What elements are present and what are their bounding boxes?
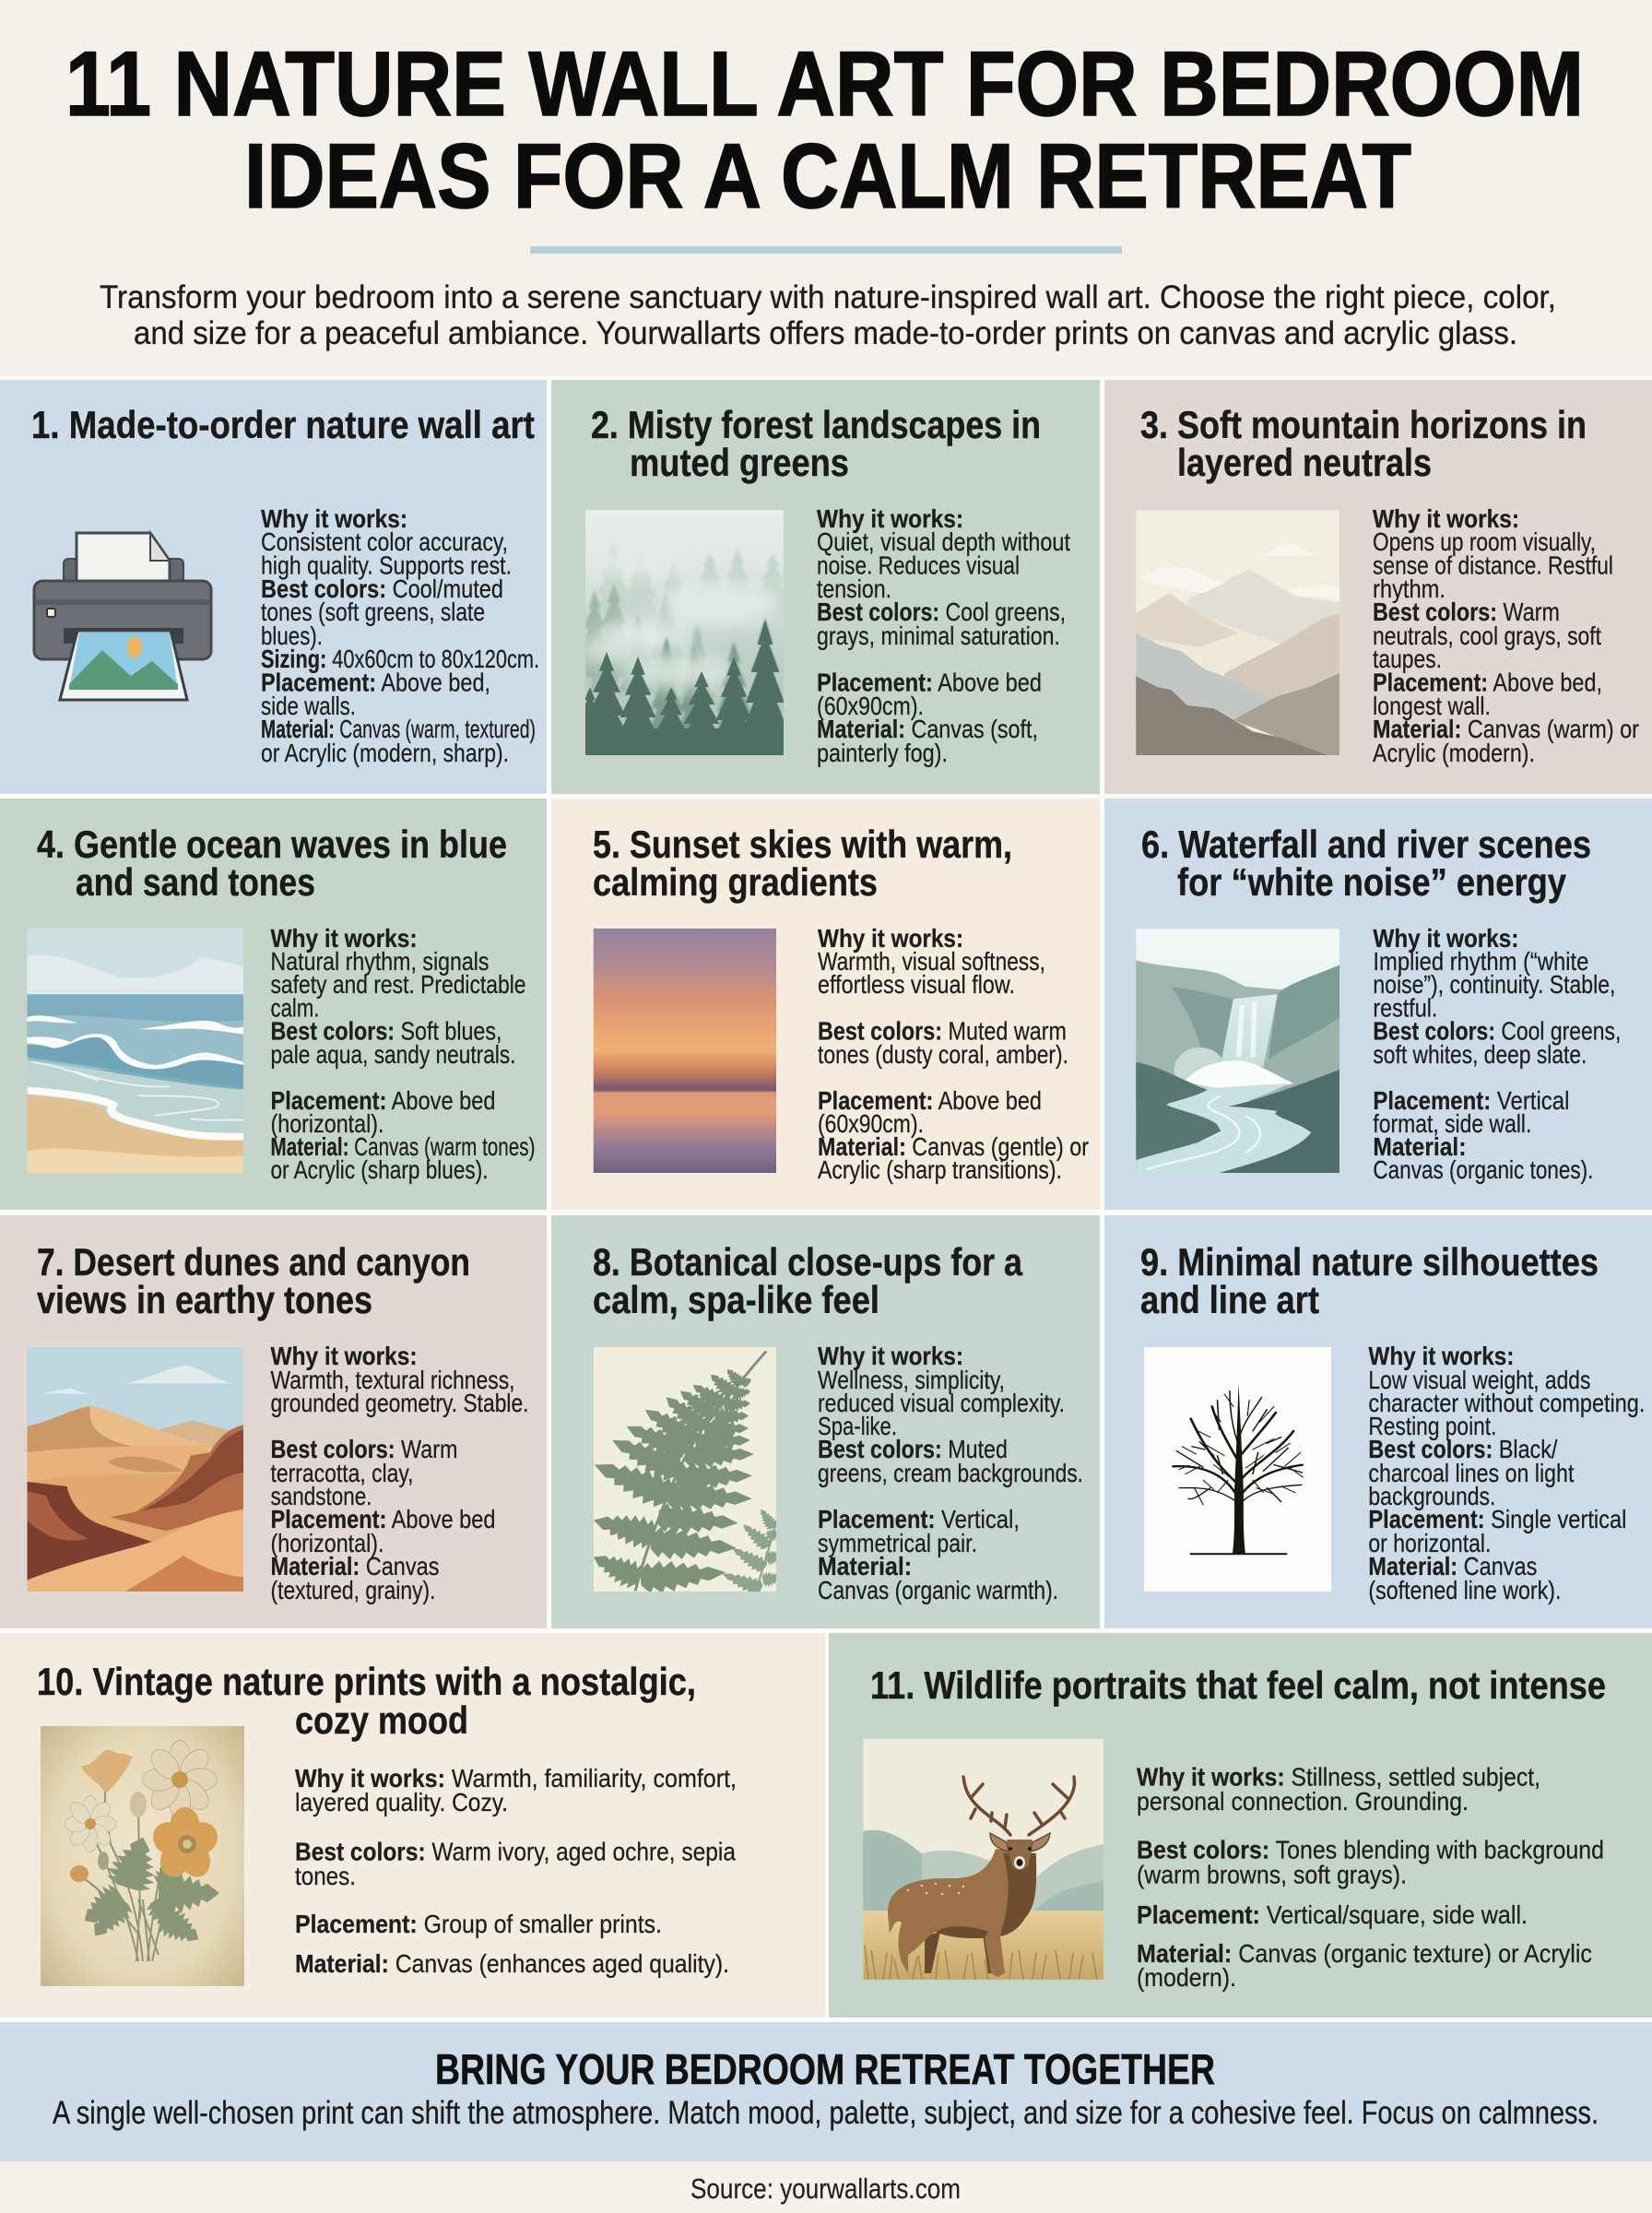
heading 7 — [37, 1240, 470, 1321]
text block 10 — [295, 1764, 737, 1978]
text block 4: (horizontal). — [271, 1109, 384, 1138]
text block 5: Warmth, visual softness, — [818, 947, 1045, 976]
heading 10 — [37, 1660, 696, 1742]
text block 10: tones. — [295, 1862, 356, 1890]
text block 1: Sizing: 40x60cm to 80x120cm. — [261, 645, 539, 673]
text block 7: grounded geometry. Stable. — [271, 1389, 529, 1417]
text block 11: (warm browns, soft grays). — [1137, 1861, 1407, 1888]
image: misty forest — [585, 510, 784, 755]
text block 1 — [261, 504, 539, 767]
image: bare tree silhouette — [1144, 1347, 1331, 1592]
text block 2: tension. — [817, 574, 891, 603]
heading 8: 8. Botanical close-ups for a — [593, 1240, 1023, 1284]
text block 4: Why it works: — [271, 924, 417, 953]
intro text: Transform your bedroom into a serene sanctuary with nature-inspired wall art. Choose the right piece, color, — [100, 279, 1556, 315]
panel 5: sunset skies — [551, 799, 1100, 1210]
heading 7: 7. Desert dunes and canyon — [37, 1240, 470, 1284]
text block 11: Placement: Vertical/square, side wall. — [1137, 1900, 1528, 1929]
text block 3: longest wall. — [1373, 692, 1491, 720]
text block 11: Best colors: Tones blending with background — [1137, 1835, 1604, 1864]
heading 6 — [1141, 822, 1591, 904]
heading 6: 6. Waterfall and river scenes — [1141, 822, 1591, 866]
text block 1: Best colors: Cool/muted — [261, 574, 503, 603]
text block 6: Material: — [1373, 1132, 1466, 1161]
text block 8: Spa-like. — [818, 1412, 897, 1440]
heading 9: and line art — [1140, 1278, 1319, 1321]
text block 1: Consistent color accuracy, — [261, 527, 508, 556]
text block 1: tones (soft greens, slate — [261, 598, 485, 626]
image: layered mountains — [1136, 510, 1339, 755]
text block 3 — [1373, 504, 1639, 767]
text block 1: or Acrylic (modern, sharp). — [261, 739, 509, 767]
text block 9: charcoal lines on light — [1368, 1459, 1575, 1487]
heading 8: calm, spa-like feel — [593, 1278, 879, 1321]
text block 6: Best colors: Cool greens, — [1373, 1016, 1621, 1046]
panel 7: desert dunes and canyon — [0, 1215, 547, 1628]
banner heading: BRING YOUR BEDROOM RETREAT TOGETHER — [435, 2045, 1215, 2093]
heading 2: muted greens — [630, 441, 849, 484]
text block 3: Best colors: Warm — [1373, 598, 1560, 626]
text block 8: Material: — [818, 1552, 912, 1580]
panel 11: wildlife portraits — [829, 1633, 1652, 2018]
text block 3: Opens up room visually, — [1373, 527, 1596, 556]
text block 9 — [1368, 1342, 1645, 1604]
heading 4: 4. Gentle ocean waves in blue — [37, 822, 507, 866]
text block 9: Resting point. — [1368, 1412, 1496, 1440]
text block 3: taupes. — [1373, 645, 1442, 673]
text block 1: blues). — [261, 621, 323, 650]
heading 4 — [37, 822, 507, 904]
text block 5: (60x90cm). — [818, 1109, 924, 1138]
text block 2: painterly fog). — [817, 739, 948, 767]
text block 7 — [271, 1342, 529, 1604]
title: IDEAS FOR A CALM RETREAT — [244, 124, 1411, 227]
text block 3: rhythm. — [1373, 574, 1446, 603]
text block 11 — [1137, 1763, 1604, 1992]
image: vintage botanical print — [41, 1726, 244, 1986]
panel 9: minimal silhouettes — [1104, 1215, 1652, 1628]
text block 2: grays, minimal saturation. — [817, 621, 1060, 650]
text block 10: Best colors: Warm ivory, aged ochre, sepia — [295, 1837, 737, 1866]
icon: printer with landscape print — [34, 533, 211, 700]
intro text — [100, 279, 1556, 351]
text block 6: Implied rhythm (“white — [1373, 947, 1588, 976]
heading 5 — [593, 822, 1012, 904]
text block 7: (horizontal). — [271, 1529, 384, 1557]
heading 5: calming gradients — [593, 860, 878, 904]
heading 1: 1. Made-to-order nature wall art — [31, 403, 535, 446]
text block 3: Why it works: — [1373, 504, 1519, 533]
text block 10: Placement: Group of smaller prints. — [295, 1910, 662, 1938]
text block 5: Why it works: — [818, 924, 963, 953]
text block 2: Material: Canvas (soft, — [817, 715, 1038, 743]
image: sunset gradient — [594, 929, 776, 1173]
heading 3: layered neutrals — [1177, 441, 1432, 484]
text block 9: Placement: Single vertical — [1368, 1505, 1626, 1533]
text block 3: Acrylic (modern). — [1373, 739, 1535, 767]
text block 6: restful. — [1373, 994, 1437, 1022]
text block 8: Best colors: Muted — [818, 1435, 1008, 1463]
text block 9: (softened line work). — [1368, 1576, 1561, 1604]
heading 3: 3. Soft mountain horizons in — [1140, 403, 1587, 446]
heading 9 — [1140, 1240, 1599, 1321]
text block 3: Placement: Above bed, — [1373, 668, 1602, 697]
text block 8: symmetrical pair. — [818, 1529, 977, 1557]
text block 4: safety and rest. Predictable — [271, 970, 525, 999]
text block 6: soft whites, deep slate. — [1373, 1040, 1587, 1069]
text block 5: Acrylic (sharp transitions). — [818, 1155, 1062, 1184]
text block 8: Canvas (organic warmth). — [818, 1576, 1058, 1604]
text block 6: Why it works: — [1373, 924, 1518, 953]
text block 6: Placement: Vertical — [1373, 1086, 1569, 1115]
text block 4: Placement: Above bed — [271, 1086, 496, 1115]
text block 8: Placement: Vertical, — [818, 1505, 1020, 1533]
panel 2: misty forest — [551, 380, 1100, 794]
text block 3: neutrals, cool grays, soft — [1373, 621, 1601, 650]
text block 5: Placement: Above bed — [818, 1086, 1042, 1115]
text block 5: Material: Canvas (gentle) or — [818, 1132, 1089, 1161]
text block 2: Quiet, visual depth without — [817, 527, 1070, 556]
text block 7: Best colors: Warm — [271, 1435, 457, 1463]
heading 6: for “white noise” energy — [1177, 860, 1567, 904]
text block 4: Best colors: Soft blues, — [271, 1016, 502, 1046]
text block 1: side walls. — [261, 692, 356, 720]
text block 9: Low visual weight, adds — [1368, 1366, 1590, 1394]
text block 7: Why it works: — [271, 1342, 417, 1370]
heading 10: 10. Vintage nature prints with a nostalgic, — [37, 1660, 696, 1703]
text block 11: Why it works: Stillness, settled subject, — [1137, 1763, 1540, 1791]
text block 1: Material: Canvas (warm, textured) — [261, 715, 536, 743]
text block 8: Wellness, simplicity, — [818, 1366, 1005, 1394]
text block 6: format, side wall. — [1373, 1109, 1531, 1138]
heading 3 — [1140, 403, 1587, 484]
heading 5: 5. Sunset skies with warm, — [593, 822, 1012, 866]
text block 7: Material: Canvas — [271, 1552, 439, 1580]
heading 2 — [591, 403, 1041, 484]
text block 4: Natural rhythm, signals — [271, 947, 489, 976]
text block 8: Why it works: — [818, 1342, 963, 1370]
text block 4: Material: Canvas (warm tones) — [271, 1132, 535, 1161]
text block 5: tones (dusty coral, amber). — [818, 1040, 1068, 1069]
text block 9: Material: Canvas — [1368, 1552, 1537, 1580]
heading 8 — [593, 1240, 1023, 1321]
closing banner — [0, 2022, 1652, 2161]
heading 4: and sand tones — [76, 860, 315, 904]
text block 4: calm. — [271, 994, 319, 1022]
panel 1: made-to-order nature wall art — [0, 380, 547, 794]
panel 4: gentle ocean waves — [0, 799, 547, 1210]
text block 2 — [817, 504, 1070, 767]
text block 8 — [818, 1342, 1083, 1604]
text block 1: Placement: Above bed, — [261, 668, 490, 697]
text block 10: Material: Canvas (enhances aged quality). — [295, 1949, 729, 1978]
text block 2: Why it works: — [817, 504, 963, 533]
panel 8: botanical close-ups — [551, 1215, 1100, 1628]
text block 10: Why it works: Warmth, familiarity, comfort, — [295, 1764, 737, 1793]
text block 1: Why it works: — [261, 504, 407, 533]
text block 7: terracotta, clay, — [271, 1459, 413, 1487]
panel 6: waterfall and river — [1104, 799, 1652, 1210]
heading 10: cozy mood — [295, 1698, 468, 1742]
text block 2: noise. Reduces visual — [817, 551, 1020, 579]
heading 7: views in earthy tones — [37, 1278, 372, 1321]
text block 9: or horizontal. — [1368, 1529, 1491, 1557]
title — [65, 32, 1584, 227]
text block 5: Best colors: Muted warm — [818, 1016, 1067, 1046]
text block 7: Placement: Above bed — [271, 1505, 496, 1533]
image: desert dunes — [27, 1347, 243, 1592]
source line: Source: yourwallarts.com — [690, 2172, 961, 2205]
intro text: and size for a peaceful ambiance. Yourwallarts offers made-to-order prints on canvas and acrylic glass. — [134, 315, 1517, 351]
text block 2: (60x90cm). — [817, 692, 924, 720]
text block 7: (textured, grainy). — [271, 1576, 435, 1604]
image: fern frond — [594, 1347, 776, 1592]
text block 5: effortless visual flow. — [818, 970, 1015, 999]
text block 5 — [818, 924, 1089, 1184]
text block 6 — [1373, 924, 1621, 1184]
text block 8: greens, cream backgrounds. — [818, 1459, 1083, 1487]
text block 9: backgrounds. — [1368, 1482, 1495, 1510]
text block 10: layered quality. Cozy. — [295, 1788, 508, 1817]
text block 2: Placement: Above bed — [817, 668, 1042, 697]
panel 10: vintage nature prints — [0, 1633, 825, 2018]
text block 9: Best colors: Black/ — [1368, 1435, 1558, 1463]
text block 9: Why it works: — [1368, 1342, 1514, 1370]
text block 4 — [271, 924, 535, 1184]
heading 2: 2. Misty forest landscapes in — [591, 403, 1041, 446]
text block 4: pale aqua, sandy neutrals. — [271, 1040, 516, 1069]
text block 7: sandstone. — [271, 1482, 372, 1510]
panel 3: soft mountain horizons — [1104, 380, 1652, 794]
text block 7: Warmth, textural richness, — [271, 1366, 514, 1394]
image: deer portrait — [863, 1739, 1103, 1980]
text block 2: Best colors: Cool greens, — [817, 598, 1066, 626]
text block 11: (modern). — [1137, 1963, 1236, 1992]
image: ocean waves — [27, 929, 243, 1173]
text block 1: high quality. Supports rest. — [261, 551, 512, 579]
text block 4: or Acrylic (sharp blues). — [271, 1155, 489, 1184]
image: waterfall and river — [1136, 929, 1339, 1174]
text block 11: Material: Canvas (organic texture) or Acrylic — [1137, 1939, 1592, 1968]
text block 8: reduced visual complexity. — [818, 1389, 1065, 1417]
text block 11: personal connection. Grounding. — [1137, 1787, 1469, 1816]
text block 6: Canvas (organic tones). — [1373, 1155, 1593, 1184]
